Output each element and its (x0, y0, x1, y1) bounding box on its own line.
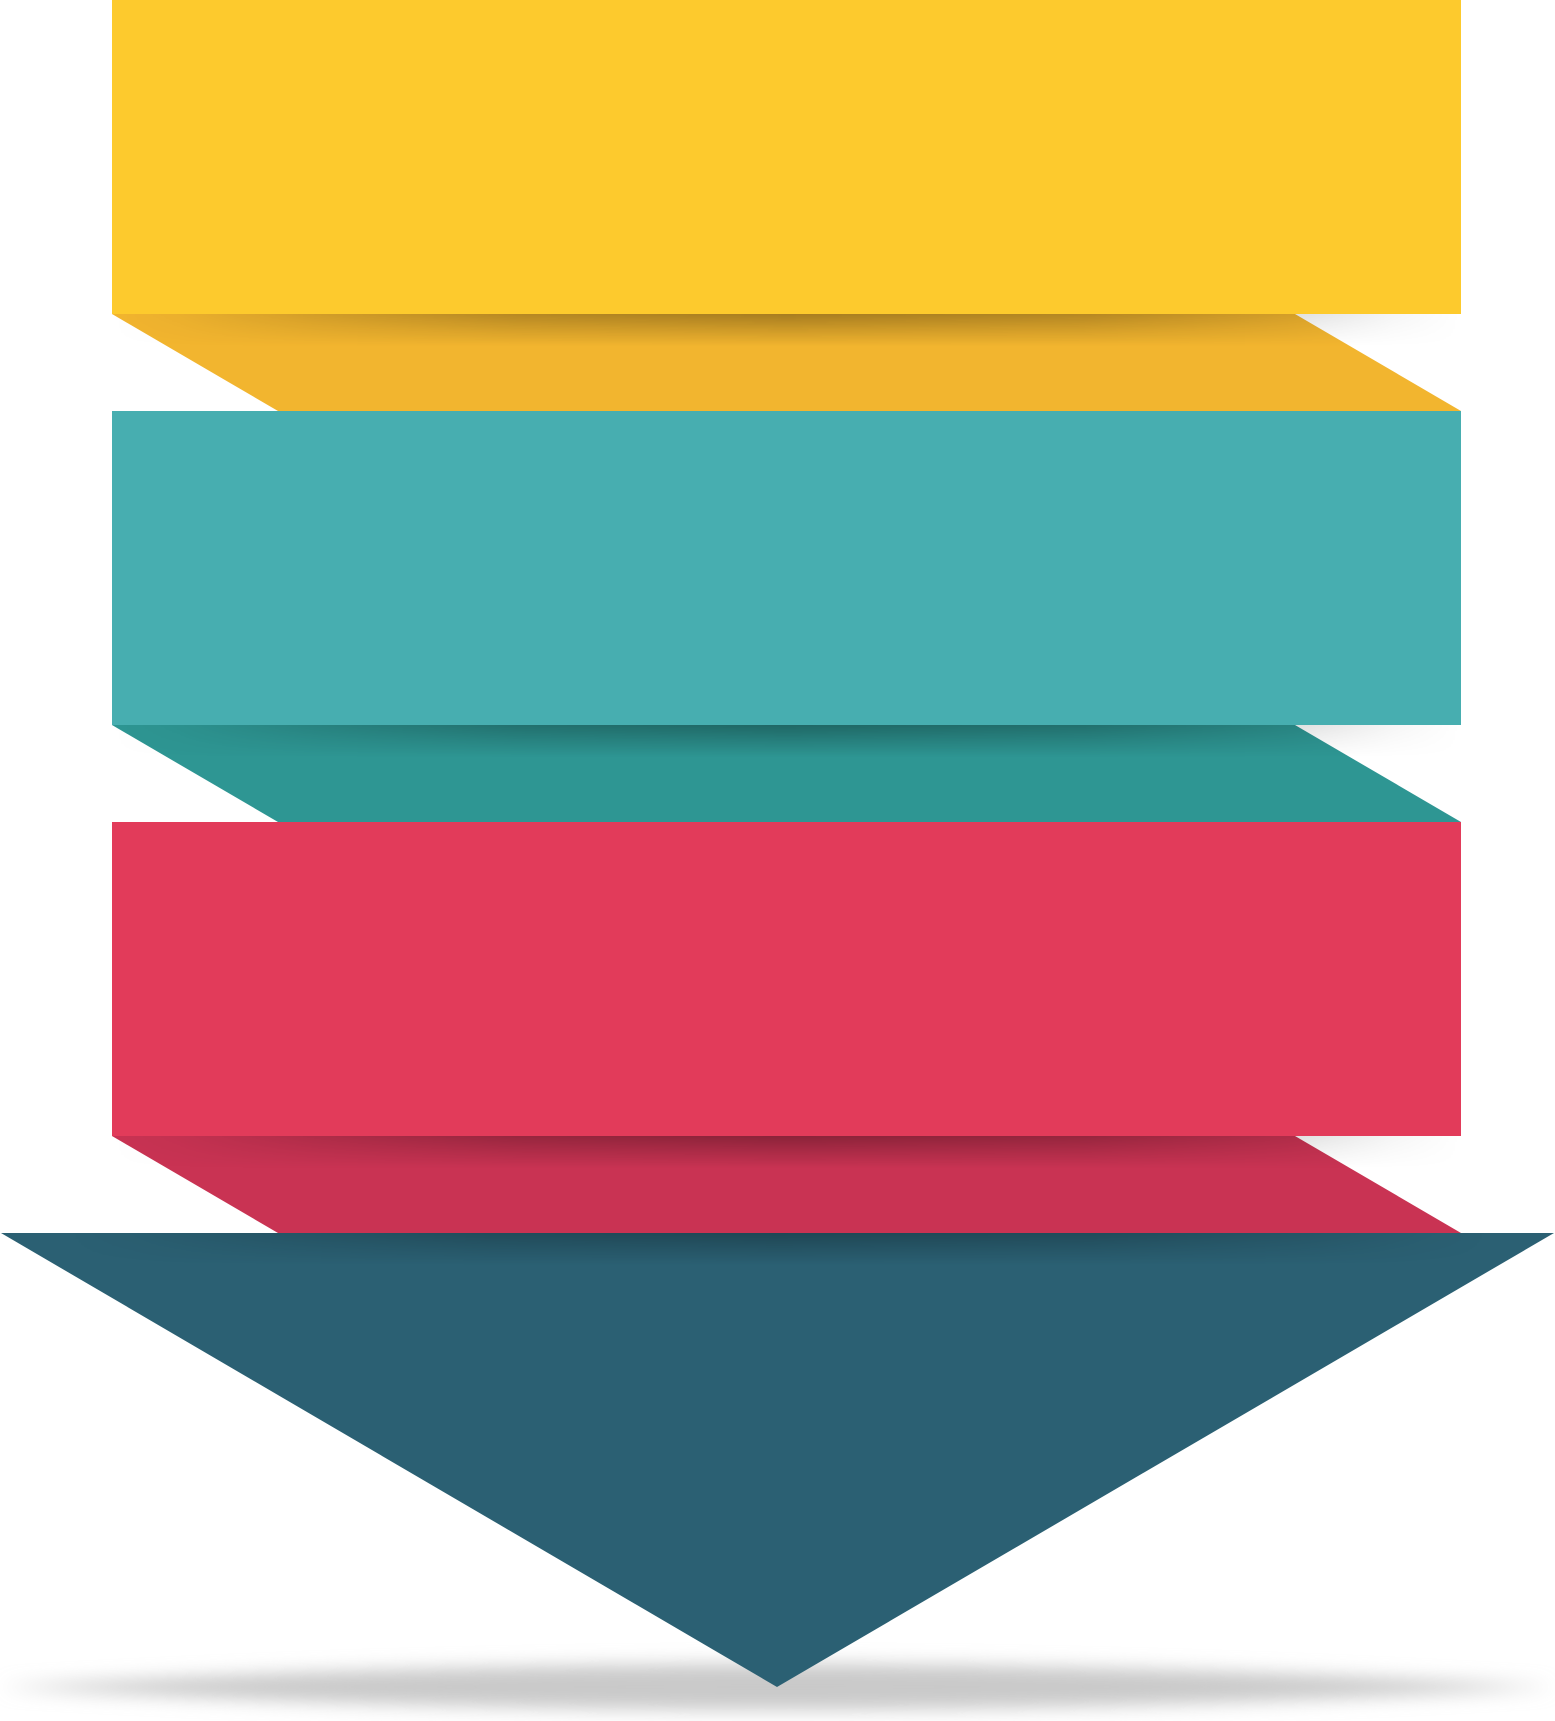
red fold (112, 1136, 1461, 1233)
teal fold (112, 725, 1461, 822)
arrow head (1, 1233, 1554, 1687)
yellow fold (112, 314, 1461, 411)
red band (112, 822, 1461, 1136)
ground shadow (0, 1664, 1555, 1710)
teal band (112, 411, 1461, 725)
yellow band (112, 0, 1461, 314)
